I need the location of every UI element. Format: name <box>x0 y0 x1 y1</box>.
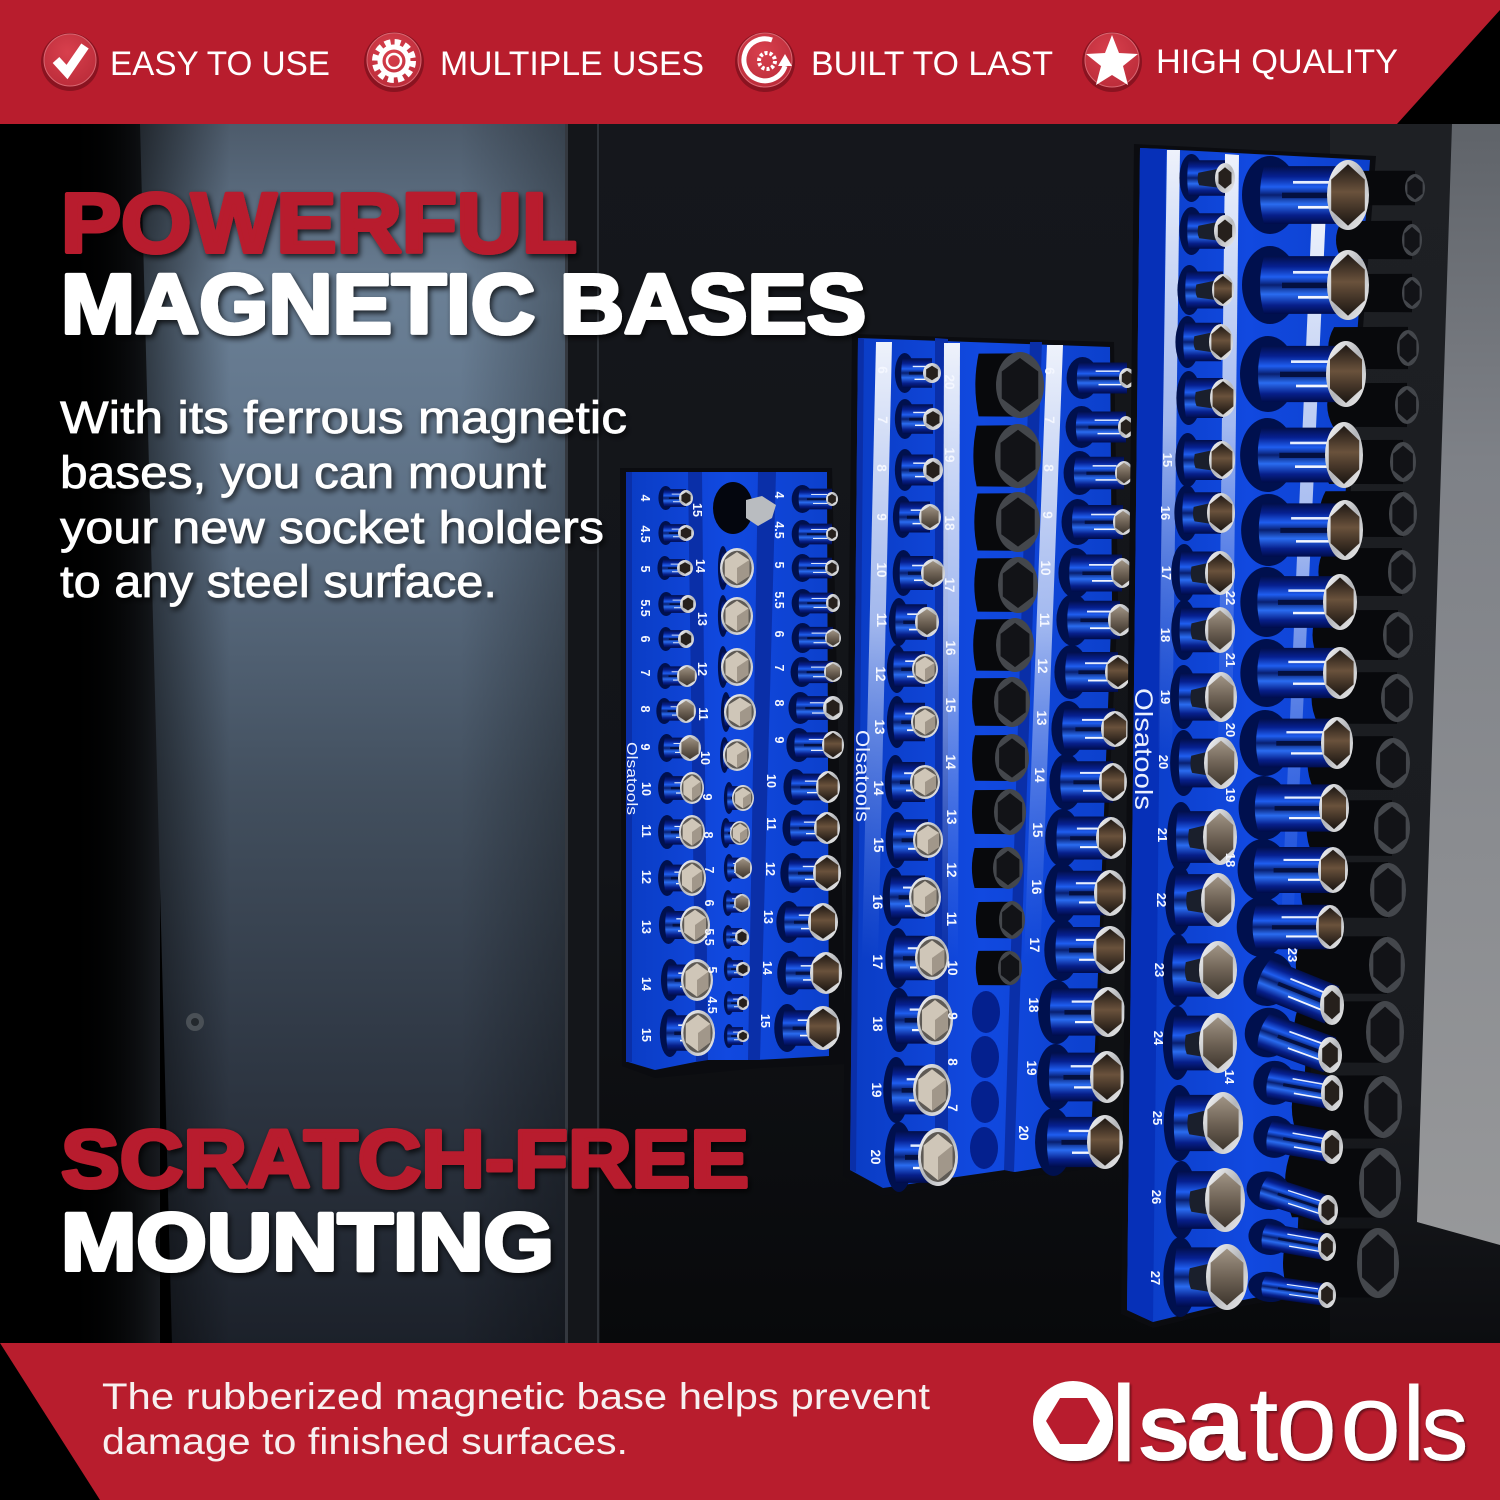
size labels: 4.5 <box>638 525 652 543</box>
badge: easy to use <box>41 33 330 91</box>
size labels: 14 <box>760 961 774 975</box>
rail logo: Olsatools <box>851 730 872 822</box>
size labels: 6 <box>875 366 890 374</box>
size labels: 6 <box>638 636 652 643</box>
size labels: 12 <box>639 870 653 884</box>
size labels: 10 <box>1038 560 1053 576</box>
size labels: 16 <box>870 894 885 910</box>
size labels: 21 <box>1223 653 1238 667</box>
size labels: 22 <box>1154 893 1169 907</box>
size labels: 15 <box>1160 453 1175 467</box>
size labels: 13 <box>1034 710 1049 726</box>
size labels: 5 <box>705 967 719 974</box>
magnetic base <box>1121 144 1376 1328</box>
size labels: 14 <box>943 754 958 770</box>
size labels: 17 <box>1027 937 1042 953</box>
icon: cycle gear <box>735 32 795 92</box>
size labels: 12 <box>1035 658 1050 674</box>
size labels: 10 <box>764 774 778 788</box>
size labels: 7 <box>1042 416 1057 424</box>
icon: check <box>41 33 99 91</box>
size labels: 19 <box>1158 690 1173 704</box>
magnetic base <box>843 334 1118 1196</box>
rail logo: Olsatools <box>1129 688 1157 810</box>
size labels: 23 <box>1152 963 1167 977</box>
size labels: 26 <box>1149 1190 1164 1204</box>
column two deep sockets <box>1235 156 1369 1310</box>
heading: powerful magnetic bases: MAGNETIC BASES <box>61 257 866 351</box>
size labels: 12 <box>763 862 777 876</box>
size labels: 17 <box>1159 566 1174 580</box>
grey side wall <box>1417 124 1500 1245</box>
heading: scratch-free mounting <box>61 1114 749 1288</box>
icon: gear <box>364 32 424 92</box>
column three sockets <box>1035 357 1135 1176</box>
column three impact sockets <box>1283 171 1425 1298</box>
size labels: 15 <box>1030 822 1045 838</box>
text block: description: to any steel surface. <box>60 556 497 607</box>
badge: built to last <box>735 32 1053 92</box>
column two sockets <box>713 482 776 1048</box>
size labels: 13 <box>944 809 959 825</box>
size labels: 9 <box>772 737 786 744</box>
size labels: 6 <box>772 631 786 638</box>
size labels: 16 <box>1029 879 1044 895</box>
size labels: 9 <box>1040 511 1055 519</box>
door left shadow <box>60 124 230 1344</box>
column two impact sockets <box>972 352 1044 985</box>
size labels: 18 <box>870 1016 885 1032</box>
size labels: 7 <box>702 867 716 874</box>
heading: scratch-free mounting: MOUNTING <box>61 1197 554 1288</box>
logo: Olsatools: s <box>1421 1375 1468 1481</box>
size labels: 10 <box>874 562 889 578</box>
size labels: 11 <box>874 613 889 628</box>
size labels: 7 <box>875 416 890 424</box>
size labels: 5.5 <box>702 928 716 946</box>
size labels: 18 <box>942 515 957 531</box>
size labels: 5.5 <box>638 599 652 617</box>
rail grooves <box>850 338 1042 1180</box>
size labels: 22 <box>1223 591 1238 605</box>
rail grooves <box>626 472 776 1062</box>
door lock <box>186 1013 204 1031</box>
size labels: 9 <box>700 794 714 801</box>
size labels: 11 <box>944 912 959 927</box>
panel: medium socket holder <box>843 334 1135 1196</box>
size labels <box>1148 453 1300 1285</box>
cabinet door panel <box>140 124 570 1344</box>
heading: scratch-free mounting: SCRATCH-FREE <box>61 1114 749 1205</box>
size labels: 15 <box>690 503 704 517</box>
size labels: 15 <box>943 697 958 713</box>
size labels: 7 <box>772 665 786 672</box>
size labels: 11 <box>639 824 653 838</box>
size labels: 27 <box>1148 1271 1163 1285</box>
size labels: 10 <box>639 782 653 796</box>
size labels: 16 <box>1158 506 1173 520</box>
blue rail <box>1127 148 1370 1322</box>
rail left face <box>1127 148 1166 1322</box>
size labels: 8 <box>638 706 652 713</box>
size labels: 4.5 <box>772 521 786 539</box>
size labels: 25 <box>1150 1111 1165 1125</box>
top banner <box>0 0 1500 124</box>
size labels: 11 <box>696 707 710 721</box>
size labels: 14 <box>1032 767 1047 783</box>
panel: small socket holder <box>620 468 846 1078</box>
size labels: 11 <box>1037 613 1052 628</box>
empty socket holes <box>970 991 1000 1169</box>
size labels: 19 <box>869 1082 884 1098</box>
size labels: 14 <box>871 780 886 796</box>
text block: description <box>60 392 627 607</box>
size labels: 5 <box>638 566 652 573</box>
size labels: 8 <box>772 700 786 707</box>
size labels: 8 <box>701 832 715 839</box>
size labels: 17 <box>870 954 885 970</box>
size labels: 15 <box>758 1014 772 1028</box>
door frame spill light <box>70 124 160 1344</box>
logo: Olsatools: l <box>1112 1365 1136 1483</box>
door right shading <box>460 124 570 1344</box>
badge: multiple uses <box>364 32 704 92</box>
heading: powerful magnetic bases: POWERFUL <box>61 176 577 270</box>
size labels: 13 <box>639 920 653 934</box>
column one sockets <box>883 353 958 1192</box>
size labels: 18 <box>1026 997 1041 1013</box>
size labels: 8 <box>1041 464 1056 472</box>
size labels: 23 <box>1285 948 1300 962</box>
size labels: 12 <box>873 666 888 682</box>
size labels: 13 <box>872 719 887 735</box>
logo: Olsatools <box>1033 1361 1468 1484</box>
blue rail <box>626 472 829 1070</box>
door seam <box>565 124 600 1344</box>
heading: powerful magnetic bases <box>61 176 866 351</box>
size labels: 14 <box>693 559 707 573</box>
text block: description: bases, you can mount <box>60 447 547 498</box>
column one sockets <box>656 486 715 1057</box>
size labels: 18 <box>1158 628 1173 642</box>
logo: Olsatools: o <box>1276 1361 1337 1484</box>
icon: star <box>1082 32 1142 92</box>
bottom banner <box>0 1343 1500 1500</box>
size labels: 16 <box>943 640 958 656</box>
size labels: 10 <box>698 751 712 765</box>
label: BUILT TO LAST <box>811 45 1053 83</box>
label: MULTIPLE USES <box>440 45 704 83</box>
size labels: 24 <box>1151 1031 1166 1046</box>
size labels: 17 <box>942 577 957 593</box>
text block: footer note: The rubberized magnetic base helps prevent <box>102 1376 931 1417</box>
column three sockets <box>774 485 844 1052</box>
size labels: 5 <box>772 562 786 569</box>
logo: Olsatools: t <box>1249 1365 1278 1483</box>
size labels: 6 <box>1042 367 1057 375</box>
cabinet right side tone <box>1330 124 1500 1344</box>
size labels: 19 <box>1024 1060 1039 1076</box>
size labels: 7 <box>945 1104 960 1112</box>
size labels: 19 <box>942 447 957 463</box>
column one sockets <box>1163 154 1248 1317</box>
size labels: 15 <box>871 837 886 853</box>
size labels: 8 <box>945 1058 960 1066</box>
size labels: 20 <box>1156 755 1171 769</box>
text block: footer note <box>102 1376 931 1462</box>
badge: high quality <box>1082 32 1398 92</box>
label: HIGH QUALITY <box>1156 43 1398 81</box>
text block: footer note: damage to finished surfaces. <box>102 1421 628 1462</box>
size labels: 20 <box>942 374 957 390</box>
size labels: 13 <box>695 612 709 626</box>
logo: Olsatools: a <box>1186 1365 1246 1483</box>
steel cabinet surface <box>600 124 1500 1344</box>
size labels: 5.5 <box>772 591 786 609</box>
size labels: 13 <box>761 910 775 924</box>
size labels: 19 <box>1223 788 1238 802</box>
size labels: 20 <box>1016 1125 1031 1141</box>
text block: description: With its ferrous magnetic <box>60 392 627 443</box>
blue rail <box>850 338 1112 1188</box>
logo: Olsatools: o <box>1340 1361 1401 1484</box>
logo: Olsatools: l <box>1402 1365 1426 1483</box>
label: EASY TO USE <box>110 45 330 83</box>
size labels: 21 <box>1155 828 1170 842</box>
size labels: 10 <box>945 960 960 976</box>
logo: Olsatools: s <box>1137 1374 1190 1481</box>
rail logo: Olsatools <box>623 742 640 815</box>
size labels: 20 <box>1223 723 1238 737</box>
glare strips <box>862 342 1063 960</box>
size labels: 11 <box>764 817 778 831</box>
size labels: 12 <box>944 862 959 878</box>
size labels: 4 <box>638 495 652 502</box>
glare strips <box>1158 150 1326 950</box>
size labels: 9 <box>638 744 652 751</box>
panel: large socket holder <box>1121 144 1425 1328</box>
size labels <box>868 366 1057 1165</box>
size labels: 6 <box>702 900 716 907</box>
text block: description: your new socket holders <box>60 502 604 553</box>
size labels: 7 <box>638 670 652 677</box>
size labels: 9 <box>874 513 889 521</box>
size labels: 15 <box>639 1028 653 1042</box>
size labels <box>638 492 786 1042</box>
size labels: 8 <box>874 464 889 472</box>
size labels: 9 <box>945 1012 960 1020</box>
size labels: 18 <box>1223 853 1238 867</box>
size labels: 4.5 <box>705 996 719 1014</box>
size labels: 14 <box>1222 1070 1237 1085</box>
magnetic base <box>620 468 846 1078</box>
size labels: 14 <box>639 977 653 991</box>
size labels: 12 <box>695 662 709 676</box>
size labels: 4 <box>772 492 786 499</box>
size labels: 20 <box>868 1149 883 1165</box>
logo: Olsatools: O <box>1035 1365 1117 1483</box>
